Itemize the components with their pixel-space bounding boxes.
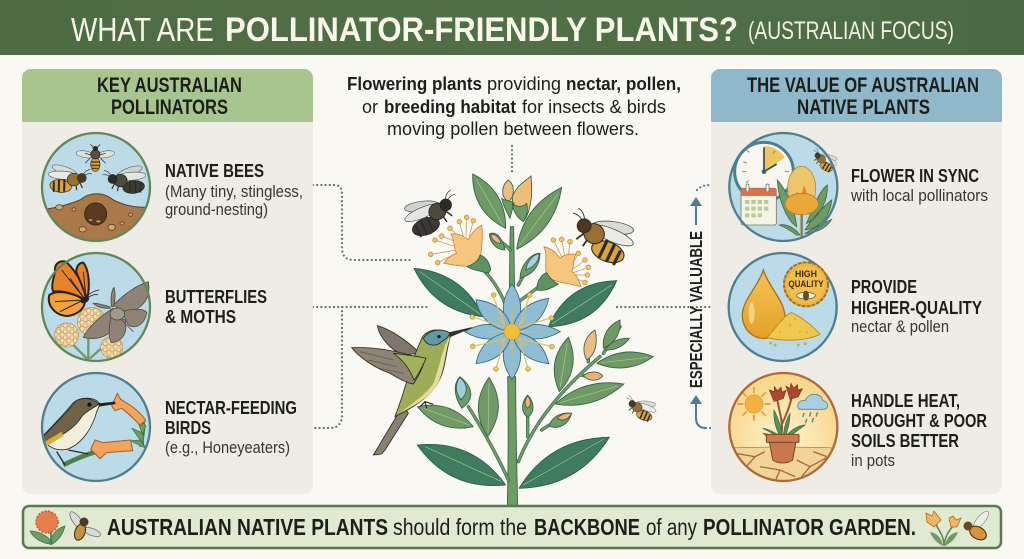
text: native bees: NATIVE BEES [165, 160, 264, 181]
panel header: pollinators: KEY AUSTRALIAN [97, 74, 242, 97]
title banner [0, 0, 1024, 55]
panel header: value: NATIVE PLANTS [797, 96, 930, 119]
top-view bee [76, 145, 115, 171]
definition text: providing [487, 74, 561, 94]
text: butterflies and moths [165, 286, 267, 327]
panel header: pollinators [22, 69, 313, 122]
banksia [777, 166, 832, 237]
rain cloud [798, 394, 828, 423]
text: handle heat, drought and poor soils: DROUGHT & POOR [851, 410, 987, 431]
text: nectar-feeding birds: (e.g., Honeyeaters) [165, 438, 290, 457]
calendar [741, 184, 776, 225]
icon: native bees circle [37, 133, 157, 247]
definition text [347, 74, 681, 139]
text: butterflies and moths: & MOTHS [165, 306, 236, 327]
badge: high quality [784, 262, 828, 306]
icon: nectar-feeding bird circle [42, 373, 150, 481]
banner text [107, 514, 916, 540]
text: nectar-feeding birds: NECTAR-FEEDING [165, 397, 297, 418]
text: flower in sync: FLOWER IN SYNC [851, 165, 979, 186]
definition text: nectar, pollen, [566, 74, 681, 94]
icon: hummingbird [352, 326, 472, 455]
especially valuable arrow label: ESPECIALLY VALUABLE [686, 231, 706, 388]
badge: high quality: QUALITY [788, 279, 824, 289]
stems [468, 227, 620, 507]
central plant illustration [352, 174, 661, 507]
moth [83, 282, 149, 343]
yellow flower left [428, 215, 491, 273]
text: nectar-feeding birds [165, 397, 297, 457]
text: higher-quality nectar and pollen: nectar & pollen [851, 317, 949, 336]
clock [735, 142, 793, 201]
kangaroo paw plant [763, 383, 805, 438]
banner text: of any [646, 514, 697, 540]
title banner: (AUSTRALIAN FOCUS) [748, 17, 954, 45]
text: higher-quality nectar and pollen: PROVIDE [851, 276, 917, 297]
badge: high quality: HIGH [795, 269, 817, 279]
icon: small bee [620, 388, 661, 426]
leaves [414, 174, 653, 488]
title banner: WHAT ARE [71, 11, 214, 48]
icon: potted plant in drought circle [727, 373, 840, 487]
text: handle heat, drought and poor soils: SOILS BETTER [851, 430, 959, 451]
text: nectar-feeding birds: BIRDS [165, 417, 211, 438]
text: higher-quality nectar and pollen: HIGHER-QUALITY [851, 297, 983, 318]
icon: banner flower left [30, 511, 65, 545]
terracotta pot [766, 434, 799, 463]
text: native bees: ground-nesting) [165, 200, 268, 219]
definition text: moving pollen between flowers. [387, 119, 639, 139]
text: handle heat, drought and poor soils: HANDLE HEAT, [851, 390, 960, 411]
text: handle heat, drought and poor soils: in pots [851, 451, 895, 470]
text: butterflies and moths: BUTTERFLIES [165, 286, 267, 307]
text: flower in sync: with local pollinators [850, 186, 988, 205]
dotted connectors [313, 146, 711, 428]
icon: banner bee right [964, 509, 991, 543]
banner text: should form the [393, 514, 527, 540]
text: native bees [165, 160, 303, 219]
definition text: breeding habitat [384, 97, 516, 117]
text: handle heat, drought and poor soils [851, 390, 987, 470]
icon: butterflies and moths circle [42, 253, 150, 361]
blue central flower [465, 284, 560, 379]
definition text: Flowering plants [347, 74, 482, 94]
title banner: POLLINATOR-FRIENDLY PLANTS? [225, 11, 738, 49]
sun [737, 387, 771, 421]
banner text: POLLINATOR GARDEN. [703, 514, 916, 540]
icon: banner flowers right [926, 511, 961, 546]
text: native bees: (Many tiny, stingless, [165, 182, 303, 201]
text: higher-quality nectar and pollen [851, 276, 983, 336]
buds [455, 176, 603, 427]
definition text: or [362, 97, 378, 117]
panel: value of Australian native plants [711, 69, 1002, 494]
especially valuable arrow label [686, 185, 712, 428]
panel header: value [711, 69, 1002, 122]
panel: key Australian pollinators [22, 69, 313, 494]
yellow flower right [537, 237, 591, 290]
butterfly [49, 261, 99, 316]
banner text: BACKBONE [534, 514, 640, 540]
icon: clock, calendar and banksia circle [729, 133, 842, 241]
definition text: for insects & birds [522, 97, 666, 117]
banner text: AUSTRALIAN NATIVE PLANTS [107, 514, 388, 540]
bottom takeaway banner [23, 506, 1001, 548]
text: flower in sync [850, 165, 988, 205]
icon: banner bee left [67, 510, 102, 542]
icon: honey bee large [559, 192, 645, 274]
icon: dark bee [395, 177, 467, 245]
panel header: pollinators: POLLINATORS [111, 96, 228, 119]
icon: nectar drop and pollen circle [729, 253, 837, 361]
